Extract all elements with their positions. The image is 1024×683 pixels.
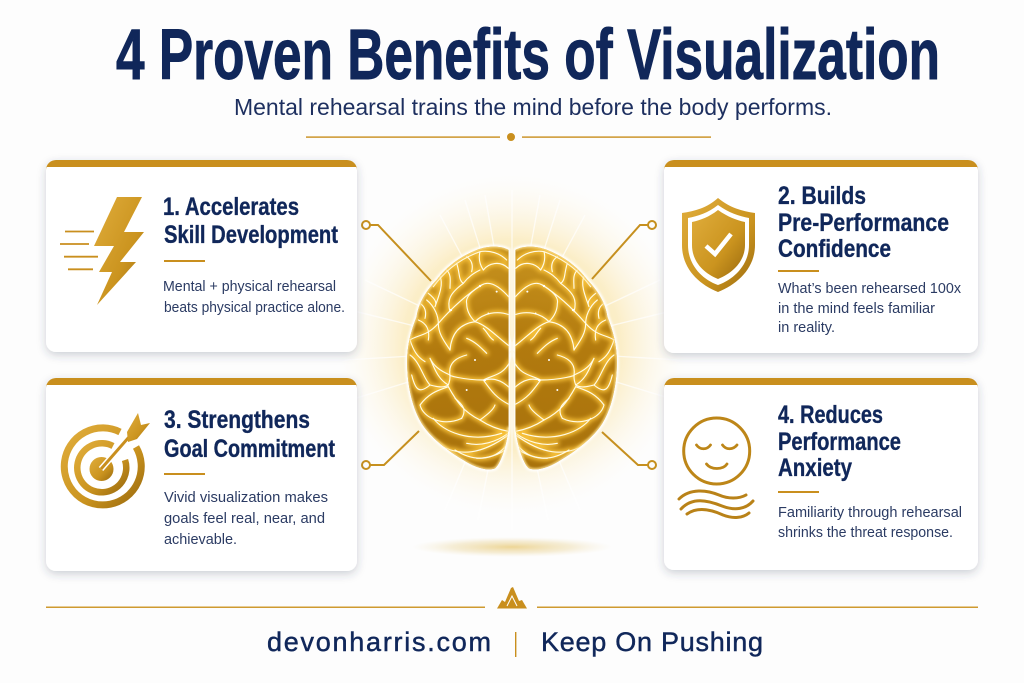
card heading: 3. Strengthens bbox=[164, 406, 310, 434]
footer text bbox=[267, 627, 763, 657]
brain glow and light rays bbox=[337, 175, 687, 530]
panel: card 4 reduces performance anxiety bbox=[664, 378, 978, 570]
connector: top right bbox=[592, 221, 656, 279]
card top bar bbox=[46, 378, 357, 388]
icon: lightning bolt bbox=[60, 197, 144, 305]
footer text: devonharris.com bbox=[267, 627, 491, 657]
footer divider bbox=[46, 606, 978, 608]
card description: Vivid visualization makes bbox=[164, 490, 328, 506]
right hemisphere bbox=[511, 240, 624, 473]
icon: mountain bbox=[497, 587, 527, 608]
floor reflection bbox=[412, 537, 612, 557]
card heading bbox=[778, 182, 949, 263]
panel: card 2 builds confidence bbox=[664, 160, 978, 353]
card heading bbox=[164, 406, 336, 463]
card heading: Performance bbox=[778, 428, 901, 456]
card heading: 2. Builds bbox=[778, 182, 866, 210]
card top bar bbox=[46, 160, 357, 170]
card heading: 1. Accelerates bbox=[163, 193, 299, 221]
card heading: Pre-Performance bbox=[778, 209, 949, 237]
header divider bbox=[306, 133, 711, 141]
icon: calm face with waves bbox=[679, 418, 753, 517]
card description: What’s been rehearsed 100x bbox=[778, 281, 962, 297]
heading rule bbox=[164, 473, 205, 475]
subtitle: Mental rehearsal trains the mind before the body performs. bbox=[234, 94, 832, 120]
footer text: Keep On Pushing bbox=[541, 627, 763, 657]
panel: card 1 accelerates skill development bbox=[46, 160, 357, 352]
card description bbox=[163, 279, 345, 316]
card description: in reality. bbox=[778, 320, 835, 336]
card description: in the mind feels familiar bbox=[778, 301, 935, 317]
heading rule bbox=[778, 270, 819, 272]
card description: beats physical practice alone. bbox=[164, 300, 345, 316]
card background bbox=[664, 160, 978, 353]
left hemisphere bbox=[400, 240, 513, 473]
card top bar bbox=[664, 378, 978, 388]
card description bbox=[164, 490, 328, 548]
card description bbox=[778, 281, 962, 336]
card description: shrinks the threat response. bbox=[778, 525, 953, 541]
card background bbox=[46, 378, 357, 571]
icon: target with arrow bbox=[64, 413, 150, 505]
icon: shield with check bbox=[682, 198, 755, 292]
connector: bottom left bbox=[362, 431, 419, 469]
card description: goals feel real, near, and bbox=[164, 511, 325, 527]
card description bbox=[778, 505, 962, 541]
card heading: Goal Commitment bbox=[164, 435, 336, 463]
central brain illustration bbox=[358, 195, 666, 556]
card heading: Anxiety bbox=[778, 454, 852, 482]
card description: Familiarity through rehearsal bbox=[778, 505, 962, 521]
card heading bbox=[778, 401, 901, 482]
card background bbox=[664, 378, 978, 570]
card heading: Skill Development bbox=[164, 221, 339, 249]
card heading: Confidence bbox=[778, 235, 891, 263]
connector: bottom right bbox=[602, 432, 656, 469]
card top bar bbox=[664, 160, 978, 170]
card background bbox=[46, 160, 357, 352]
card description: achievable. bbox=[164, 532, 237, 548]
card description: Mental + physical rehearsal bbox=[163, 279, 336, 295]
heading rule bbox=[778, 491, 819, 493]
card heading: 4. Reduces bbox=[778, 401, 883, 429]
card heading bbox=[163, 193, 339, 249]
heading rule bbox=[164, 260, 205, 262]
panel: card 3 strengthens goal commitment bbox=[46, 378, 357, 571]
connector: top left bbox=[362, 221, 431, 281]
